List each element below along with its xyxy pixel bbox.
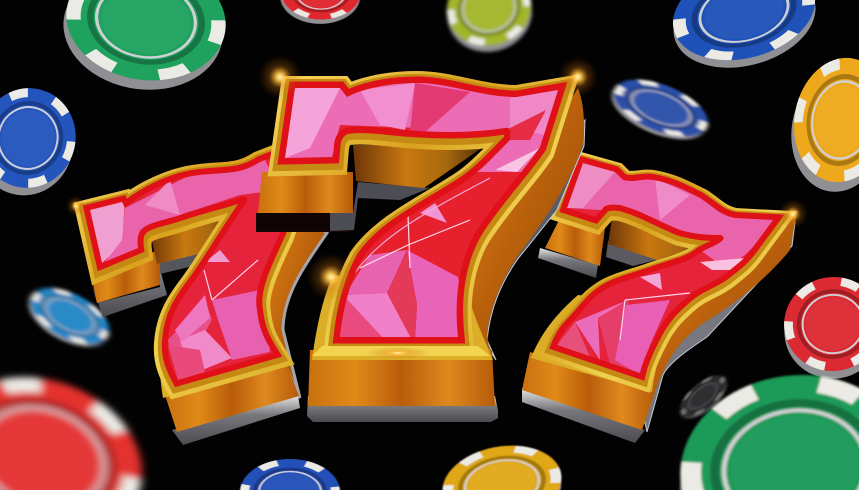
sparkle: right seven corner bbox=[778, 199, 808, 229]
chip: teal blue small left bbox=[19, 276, 118, 359]
center seven: red inner border bbox=[285, 83, 558, 337]
sparkle: center seven top left bbox=[258, 55, 302, 99]
chip: grey blurred bbox=[673, 368, 734, 426]
right seven: side extrusion bbox=[640, 216, 796, 398]
chip: olive top bbox=[437, 0, 541, 61]
sparkle: center base bbox=[366, 347, 430, 359]
left seven: lip shadow bbox=[256, 213, 355, 232]
right seven: arm front bbox=[545, 214, 605, 266]
center seven: hole inner face bbox=[353, 145, 486, 188]
left seven: hole inner face bbox=[150, 210, 236, 264]
chip: yellow bottom bbox=[435, 437, 569, 490]
chip: green top left bbox=[56, 0, 234, 100]
center seven: base front bbox=[308, 350, 495, 406]
chip: blue bottom bbox=[239, 459, 340, 490]
chip: blue top right bbox=[661, 0, 828, 83]
left seven: side extrusion bbox=[262, 205, 327, 398]
sparkles bbox=[66, 55, 808, 359]
chip: blue left bbox=[0, 77, 87, 206]
left seven: red inner border bbox=[90, 155, 292, 380]
left seven: gem facets bbox=[90, 158, 280, 380]
left seven: dark gold inner band bbox=[90, 157, 292, 382]
center seven: side extrusion bbox=[460, 88, 584, 356]
left seven: hole chrome bbox=[158, 250, 207, 274]
right seven: hole inner face bbox=[608, 218, 710, 260]
right seven bbox=[522, 150, 796, 443]
chip: red right bbox=[776, 269, 859, 386]
sparkle: center seven left bend bbox=[307, 253, 355, 301]
center seven: gem facets bbox=[285, 83, 558, 337]
chip: red bottom left bbox=[0, 349, 165, 490]
right seven: side extrusion chrome bbox=[640, 222, 795, 432]
right seven: red inner border bbox=[557, 163, 773, 373]
center seven: lip shadow block bbox=[256, 213, 353, 231]
right seven: arm chrome bbox=[538, 248, 598, 278]
left seven: base chrome bbox=[172, 395, 300, 445]
left seven: arm chrome underside bbox=[92, 252, 207, 317]
right seven: dark gold inner band bbox=[557, 165, 773, 375]
chip: red top bbox=[280, 0, 361, 24]
center seven: side extrusion chrome bbox=[470, 120, 585, 360]
center seven: lip front bbox=[258, 172, 353, 213]
center seven: lip chrome bbox=[330, 182, 430, 231]
center seven: gold frame bbox=[285, 86, 558, 340]
sparkle: left seven corner bbox=[66, 196, 86, 216]
center seven bbox=[256, 70, 585, 422]
left seven bbox=[80, 150, 355, 445]
chip: green bottom right bbox=[666, 360, 859, 490]
right seven: gold base flare bbox=[531, 295, 675, 392]
right seven: hole chrome bbox=[606, 241, 660, 266]
chip: blue middle bbox=[604, 68, 716, 151]
left seven: base front bbox=[165, 360, 299, 432]
right seven: gem facets bbox=[557, 163, 773, 373]
chip: yellow right bbox=[782, 50, 859, 200]
center seven: dark gold inner band bbox=[285, 85, 558, 339]
right seven: base front bbox=[522, 352, 655, 430]
center seven: base chrome bbox=[307, 396, 498, 422]
right seven: base chrome bbox=[522, 388, 645, 443]
sparkle: center seven top right bbox=[558, 57, 598, 97]
right seven: gold frame bbox=[557, 166, 773, 376]
center seven: gold base flare bbox=[312, 275, 493, 360]
left seven: arm front bbox=[90, 250, 160, 303]
center seven: gold base highlight bbox=[312, 346, 490, 356]
left seven: gold frame bbox=[90, 158, 292, 383]
left seven: gold base flare bbox=[160, 300, 288, 398]
